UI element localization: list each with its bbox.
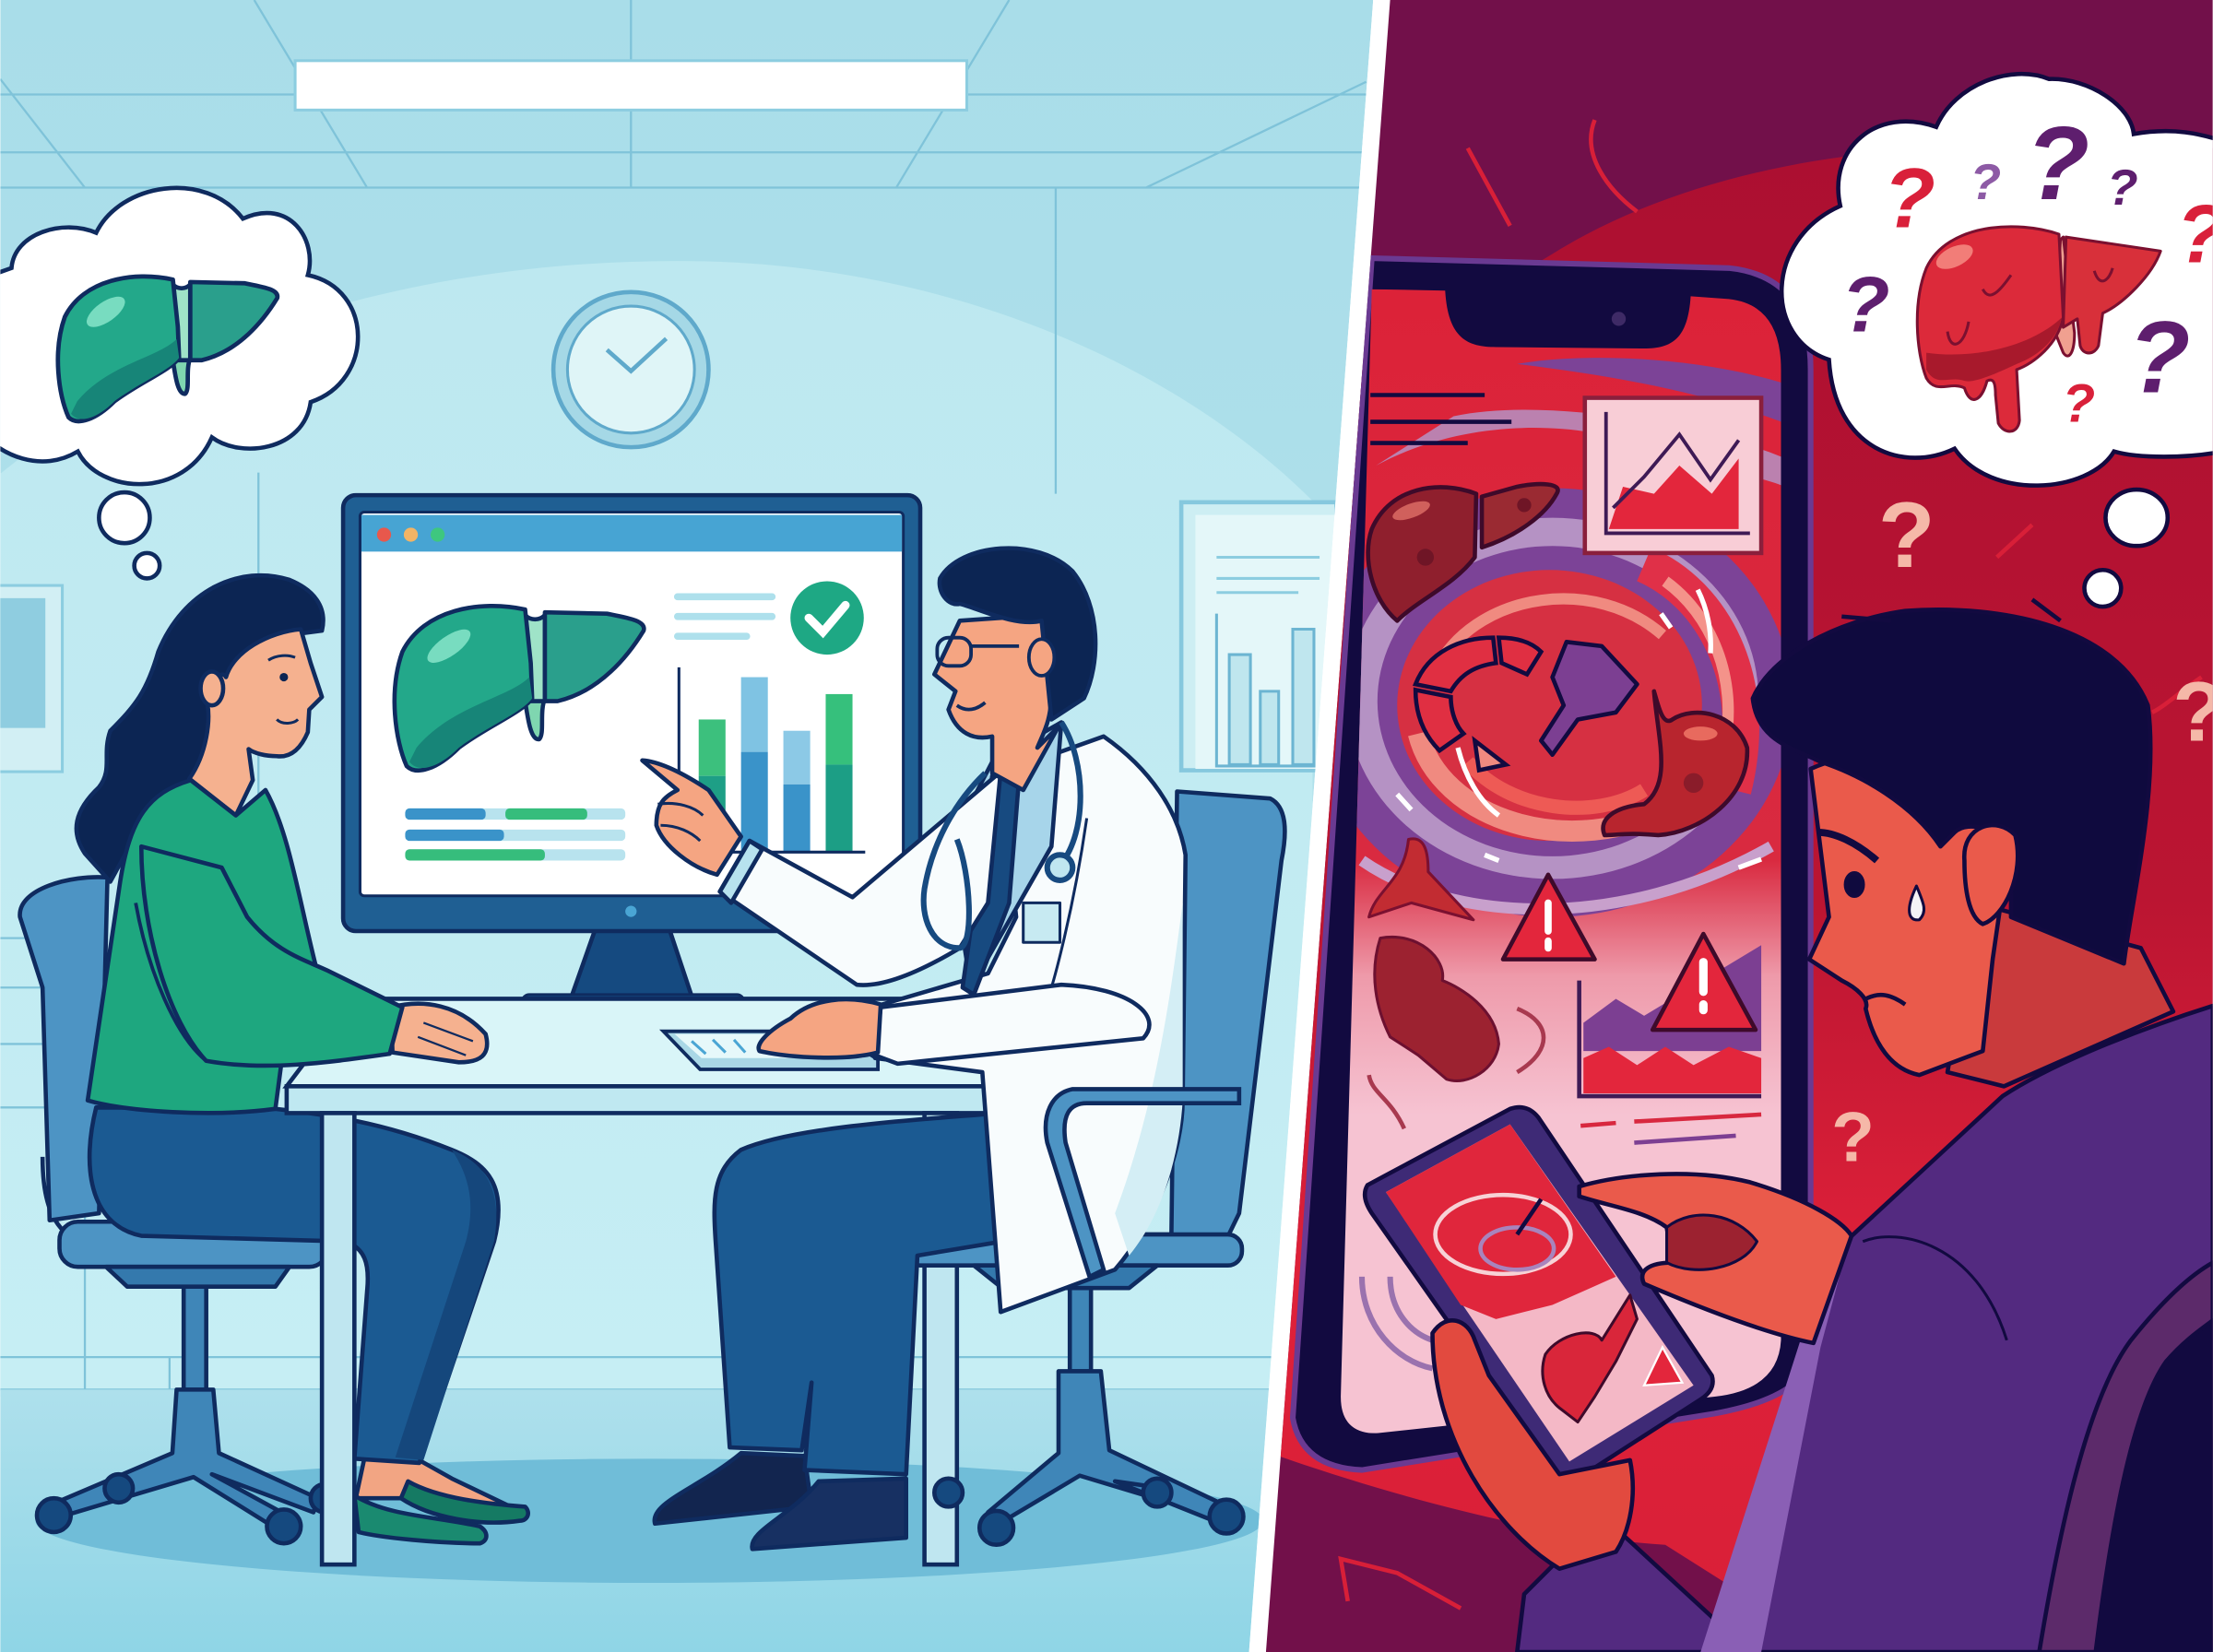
- thought bubble: healthy liver: [0, 188, 358, 578]
- woman's trousers: [89, 1107, 499, 1463]
- wall poster right with bar chart: [1181, 502, 1336, 771]
- check badge: [790, 581, 864, 655]
- inflamed organ upper: [1369, 839, 1473, 920]
- phone screen: [1312, 282, 1793, 1439]
- woman's arm and hand: [136, 846, 487, 1066]
- clinic room background: [0, 0, 1383, 1652]
- text lines on phone: [1370, 395, 1511, 443]
- text lines on screen: [678, 596, 772, 636]
- doctor's trousers: [715, 1113, 1002, 1474]
- question marks in bubble: ?: [1884, 151, 1935, 245]
- wall clock: [553, 292, 708, 447]
- question marks in bubble: ?: [1841, 261, 1889, 349]
- doctor's armrest: [1046, 1089, 1239, 1277]
- doctor's lower sleeve: [875, 985, 1149, 1064]
- man's lower hand: [1433, 1320, 1633, 1569]
- keyboard tablet: [663, 1032, 878, 1069]
- tear drop: [1910, 886, 1924, 920]
- woman's hair: [77, 575, 323, 881]
- doctor's ear and glasses: [937, 638, 1054, 710]
- monitor screen: [360, 513, 904, 896]
- doctor's chair: [906, 792, 1284, 1545]
- question marks in bubble: ?: [2107, 159, 2138, 216]
- bar chart on screen: [679, 667, 865, 852]
- panel: anxious online search: [1242, 0, 2213, 1652]
- man's ear: [1964, 825, 2018, 924]
- melting liver: [1917, 227, 2160, 431]
- floating question marks: ?: [1878, 484, 1935, 587]
- woman's face details: [201, 655, 298, 723]
- woman's chair: [20, 877, 339, 1543]
- purple damaged organ: [1541, 642, 1637, 755]
- area chart with warning: [1580, 934, 1761, 1096]
- woman: [77, 575, 528, 1543]
- small warning triangle: [1644, 1347, 1682, 1386]
- white divider: [1249, 0, 1391, 1652]
- panel: calm doctor consultation: [0, 0, 1383, 1652]
- healthy liver on screen: [395, 606, 644, 771]
- browser title bar: [361, 515, 902, 551]
- man: [1433, 599, 2213, 1652]
- woman's shoes: [354, 1453, 528, 1543]
- doctor's pointing hand: [643, 761, 741, 875]
- ceiling light: [295, 61, 966, 110]
- desk: [287, 998, 995, 1564]
- monitor stand: [570, 933, 693, 994]
- coat badge: [1024, 903, 1059, 942]
- phone footer lines: [1580, 1115, 1761, 1126]
- red maroon background: [1242, 0, 2213, 1652]
- wall poster left: [0, 585, 63, 772]
- floating question marks: ?: [1831, 1098, 1875, 1176]
- stomach organ: [1604, 691, 1747, 835]
- dark liver on phone: [1368, 484, 1557, 620]
- doctor's hand on keyboard: [759, 999, 881, 1057]
- chart card: [1585, 398, 1761, 553]
- man's jacket: [1517, 1006, 2213, 1652]
- doctor: [643, 549, 1186, 1549]
- thought bubble: melting liver: [1781, 74, 2213, 607]
- man's neck: [1947, 903, 2173, 1086]
- inflamed organ lower: [1375, 937, 1498, 1080]
- doctor's shoes: [655, 1453, 906, 1549]
- small swirl: [1436, 1195, 1570, 1274]
- question marks in bubble: ?: [2128, 301, 2190, 414]
- man's upper hand: [1580, 1174, 1852, 1343]
- stethoscope: [924, 723, 1081, 948]
- large smartphone: [1293, 258, 1811, 1470]
- doctor's pointing sleeve: [720, 772, 1000, 985]
- doctor's white coat: [875, 737, 1186, 1312]
- gauge ring: [1415, 638, 1541, 771]
- progress bars on screen: [405, 808, 625, 860]
- question marks in bubble: ?: [2026, 104, 2089, 221]
- man's hair: [1753, 609, 2150, 963]
- woman's head and neck: [189, 630, 322, 816]
- phone camera dot: [1612, 312, 1626, 326]
- doctor's head and neck: [934, 615, 1059, 790]
- question marks in bubble: ?: [2063, 374, 2095, 434]
- computer monitor: [343, 495, 920, 1013]
- small handheld phone: [1365, 1107, 1712, 1481]
- warning triangle on phone: [1503, 875, 1594, 960]
- woman's sweater: [88, 780, 318, 1113]
- floating question marks: [1831, 484, 2213, 1176]
- doctor's hair: [940, 549, 1095, 719]
- monitor frame: [343, 495, 920, 931]
- seat back: [2040, 1263, 2213, 1652]
- question marks in bubble: [1841, 104, 2213, 434]
- small red liver: [1543, 1295, 1637, 1422]
- man's eye and brow: [1817, 832, 1905, 1005]
- question marks in bubble: ?: [1970, 153, 2001, 210]
- doctor's shirt and tie: [949, 723, 1061, 995]
- man's face: [1809, 754, 2011, 1075]
- swirl vortex: [1312, 358, 1793, 917]
